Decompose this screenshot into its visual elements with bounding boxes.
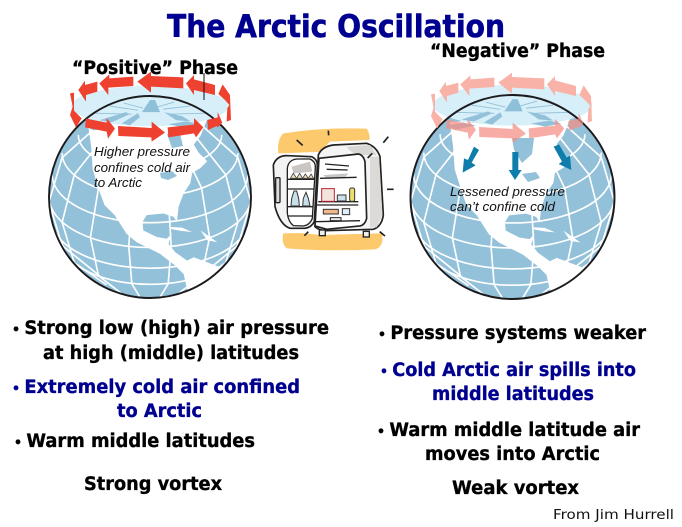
arrows: cold air spilling south [463, 144, 571, 180]
text: positive phase bullets [12, 318, 329, 495]
great lakes [522, 172, 540, 182]
arrows: weak pink vortex [431, 73, 592, 143]
text: negative phase bullets [377, 323, 647, 499]
bullet: pressure systems weaker: • Pressure systems weaker [378, 323, 647, 344]
text: negative phase bullets: moves into Arctic [425, 444, 600, 465]
bullet: warm air moves into arctic: • Warm middle latitude air [377, 420, 641, 441]
label: weak vortex: Weak vortex [452, 478, 579, 499]
text: higher pressure note: to Arctic [94, 176, 143, 190]
hudson bay [512, 138, 534, 163]
icon: open refrigerator [268, 128, 394, 250]
text: negative phase bullets: middle latitudes [432, 384, 594, 405]
arctic land patch [167, 134, 183, 148]
credit: From Jim Hurrell [553, 508, 674, 523]
globe: positive phase [49, 86, 251, 298]
heading: negative phase: “Negative” Phase [430, 41, 605, 62]
globe: negative phase [410, 85, 614, 299]
arrows: strong red vortex [70, 72, 231, 142]
bullet: cold arctic air spills: • Cold Arctic air spills into [380, 360, 636, 381]
text: higher pressure note: Higher pressure [94, 145, 190, 159]
bullet: strong low pressure: • Strong low (high) air pressure [12, 318, 329, 339]
label: strong vortex: Strong vortex [84, 474, 222, 495]
great lakes [160, 171, 177, 180]
text: higher pressure note: confines cold air [94, 161, 191, 175]
panel: negative phase globe [410, 73, 614, 299]
text: lessened pressure note: Lessened pressure [450, 185, 565, 199]
title: The Arctic Oscillation [167, 9, 505, 45]
panel: positive phase globe [49, 72, 251, 298]
text: lessened pressure note: can’t confine cold [450, 200, 556, 214]
heading: positive phase: “Positive” Phase [72, 58, 238, 79]
text: positive phase bullets: to Arctic [117, 401, 202, 422]
text: positive phase bullets: at high (middle) latitudes [43, 343, 299, 364]
bullet: warm middle latitudes: • Warm middle latitudes [14, 431, 255, 452]
bullet: extremely cold air: • Extremely cold air confined [12, 377, 300, 398]
